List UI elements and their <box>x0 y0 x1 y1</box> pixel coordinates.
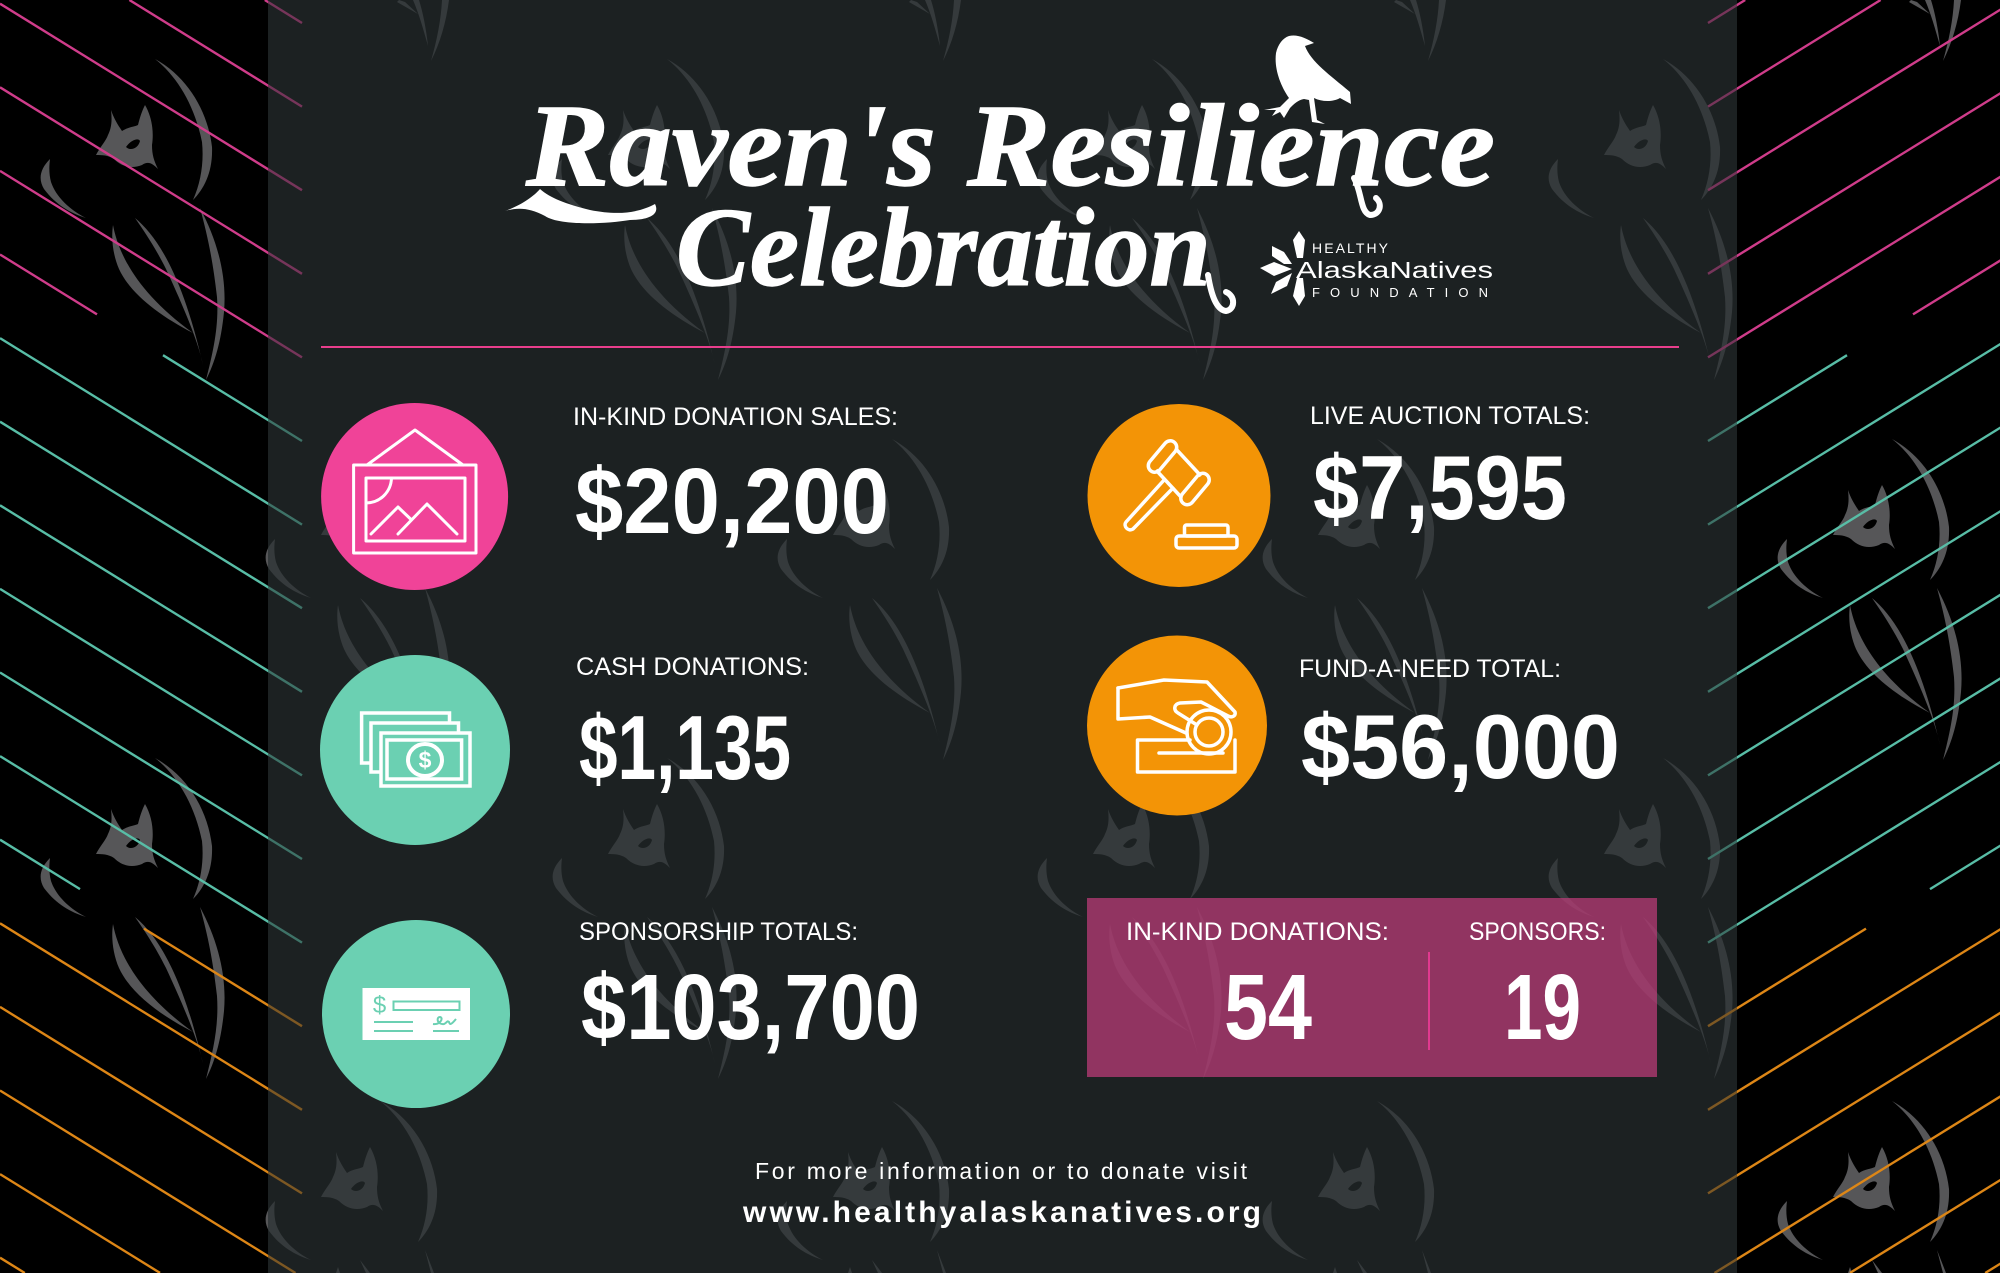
value: $7,595 <box>1313 438 1567 539</box>
stat: fund-a-need total <box>1087 636 1620 816</box>
icon: banknotes: $ <box>419 747 432 773</box>
value: $56,000 <box>1301 697 1620 798</box>
header divider <box>321 346 1679 348</box>
stat: cash donations <box>320 653 809 845</box>
title: Celebration <box>676 186 1211 310</box>
panel: in-kind donations and sponsors counts <box>1087 898 1657 1077</box>
icon: gavel <box>1088 404 1270 587</box>
icon: cheque: $ <box>373 992 386 1019</box>
label: CASH DONATIONS: <box>576 653 809 681</box>
stat: in-kind donation sales <box>321 403 898 590</box>
logo: Healthy Alaska Natives Foundation: FOUNDATION <box>1312 285 1488 300</box>
diagonal lines right <box>1708 0 2000 1273</box>
footer text: For more information or to donate visit <box>755 1158 1248 1184</box>
label: IN-KIND DONATION SALES: <box>573 403 898 431</box>
icon: banknotes <box>320 655 510 845</box>
value: 54: 54 <box>1224 955 1312 1059</box>
icon: cheque <box>322 920 510 1108</box>
icon: framed picture <box>321 403 508 590</box>
dimmed line ends over panel <box>268 0 1737 1273</box>
footer text: www.healthyalaskanatives.org <box>742 1196 1261 1229</box>
icon: raven perched on title <box>1264 35 1351 124</box>
value: $20,200 <box>575 449 889 553</box>
label: LIVE AUCTION TOTALS: <box>1310 402 1590 430</box>
footer text <box>742 1158 1261 1229</box>
stat: live auction totals <box>1088 402 1590 587</box>
label: SPONSORSHIP TOTALS: <box>579 918 858 946</box>
title <box>505 80 1495 311</box>
title: Raven's Resilience <box>525 80 1495 211</box>
logo: Healthy Alaska Natives Foundation: AlaskaNatives <box>1296 257 1493 283</box>
value: $103,700 <box>581 955 920 1059</box>
diagonal lines left <box>0 0 302 1273</box>
label: in-kind donations: IN-KIND DONATIONS: <box>1126 918 1389 946</box>
label: FUND-A-NEED TOTAL: <box>1299 655 1561 683</box>
logo: Healthy Alaska Natives Foundation <box>1260 231 1493 306</box>
central dark panel <box>268 0 1737 1273</box>
icon: hand dropping coin <box>1087 636 1267 816</box>
value: $1,135 <box>579 698 791 799</box>
logo: Healthy Alaska Natives Foundation: HEALTHY <box>1312 240 1389 256</box>
value: 19: 19 <box>1504 955 1581 1059</box>
stat: sponsorship totals <box>322 918 920 1108</box>
label: sponsors: SPONSORS: <box>1469 918 1606 946</box>
